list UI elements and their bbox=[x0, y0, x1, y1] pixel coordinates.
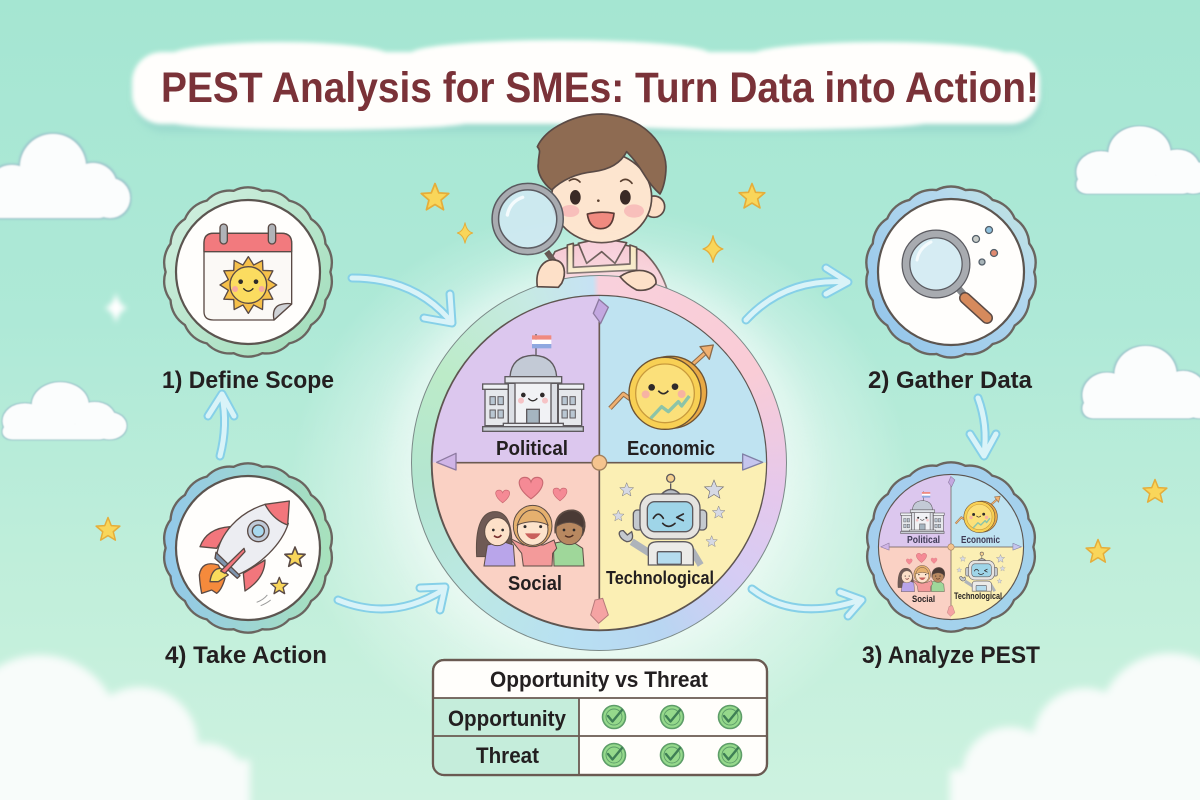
mini wheel art bbox=[879, 475, 1023, 619]
arrow: action to wheel bbox=[338, 587, 445, 610]
character with magnifying glass bbox=[495, 114, 667, 290]
quadrant labels: Political bbox=[496, 438, 568, 460]
quadrant labels bbox=[496, 438, 715, 595]
table heading: Opportunity vs Threat bbox=[490, 667, 709, 692]
arrow: scope to wheel bbox=[352, 278, 452, 323]
step label 3: 3) Analyze PEST bbox=[862, 642, 1040, 669]
arrow: wheel to gather data bbox=[746, 268, 848, 320]
arrow: wheel to analyze bbox=[752, 589, 862, 616]
step label 4: 4) Take Action bbox=[165, 642, 327, 669]
step label 1: 1) Define Scope bbox=[162, 367, 334, 394]
cloud: mid left bbox=[3, 382, 126, 439]
badge 4: rocket bbox=[164, 463, 332, 633]
main PEST wheel bbox=[399, 263, 799, 663]
badge 3: mini PEST wheel bbox=[867, 462, 1035, 632]
badge 1: calendar bbox=[164, 187, 332, 357]
quadrant labels: Economic bbox=[627, 438, 715, 460]
mini labels: Political bbox=[907, 535, 940, 546]
opportunity vs threat table bbox=[433, 660, 767, 775]
cloud: bottom left bbox=[0, 655, 250, 800]
step label 2: 2) Gather Data bbox=[868, 367, 1033, 394]
title: PEST Analysis for SMEs: Turn Data into Action! bbox=[161, 64, 1039, 112]
mini labels: Technological bbox=[954, 591, 1002, 602]
row label threat: Threat bbox=[476, 743, 540, 768]
stars and sparkles bbox=[96, 184, 1167, 562]
cloud: mid right bbox=[1083, 346, 1200, 418]
arrow: gather to analyze bbox=[970, 398, 996, 456]
icon: calendar with sun bbox=[204, 224, 292, 320]
title banner bbox=[132, 40, 1040, 132]
check marks bbox=[602, 706, 742, 766]
icon: magnifier and dots bbox=[906, 226, 998, 318]
cloud: top left bbox=[0, 134, 130, 218]
cloud: top right bbox=[1077, 126, 1200, 194]
badge 2: magnifying glass bbox=[866, 186, 1036, 358]
character hands on rim bbox=[537, 260, 656, 290]
mini labels: Economic bbox=[961, 535, 1000, 546]
icon: rocket bbox=[199, 501, 305, 606]
quadrant labels: Social bbox=[508, 573, 562, 595]
mini labels bbox=[907, 535, 1002, 605]
cloud: bottom right bbox=[950, 653, 1200, 800]
white sparkle bbox=[104, 292, 128, 324]
arrow: action to scope bbox=[208, 394, 234, 456]
quadrant art: political, economic, social, technological bbox=[433, 296, 766, 629]
wheel rim bbox=[411, 275, 787, 651]
mini labels: Social bbox=[912, 594, 935, 605]
quadrant labels: Technological bbox=[606, 568, 714, 588]
row label opportunity: Opportunity bbox=[448, 706, 567, 731]
